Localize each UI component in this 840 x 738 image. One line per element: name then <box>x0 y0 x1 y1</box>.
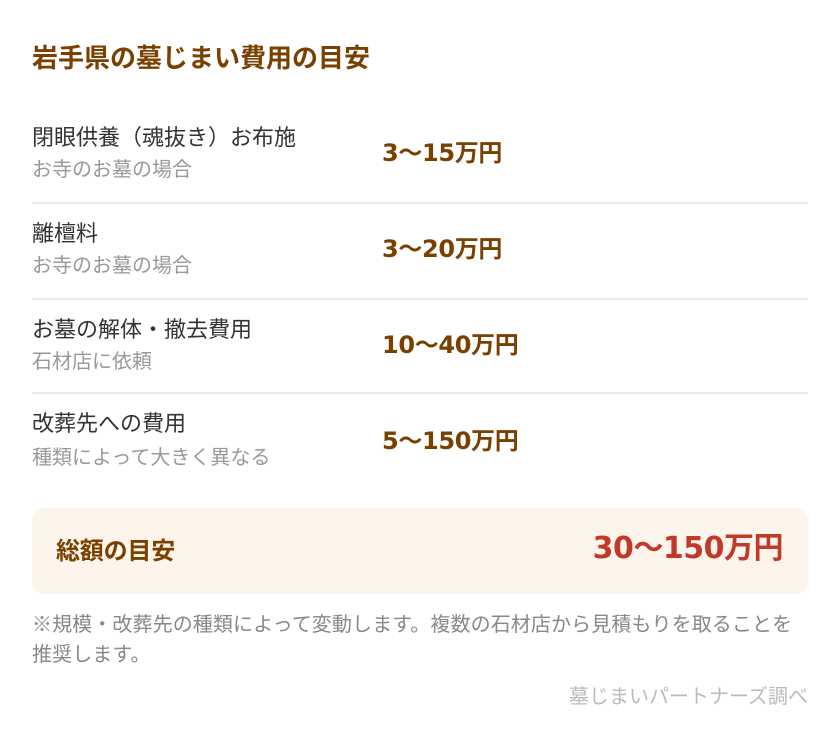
row note: 石材店に依頼 <box>32 351 152 373</box>
total panel <box>32 508 808 594</box>
row amount: 3〜15万円 <box>382 139 502 167</box>
row label: 閉眼供養（魂抜き）お布施 <box>32 125 296 150</box>
row note: お寺のお墓の場合 <box>32 255 192 277</box>
row amount: 10〜40万円 <box>382 331 518 359</box>
row note: お寺のお墓の場合 <box>32 159 192 181</box>
row label: お墓の解体・撤去費用 <box>32 317 252 342</box>
row label: 改葬先への費用 <box>32 411 186 436</box>
footnote <box>32 614 792 666</box>
total amount: 30〜150万円 <box>593 531 783 566</box>
footnote: ※規模・改葬先の種類によって変動します。複数の石材店から見積もりを取ることを <box>32 614 792 636</box>
row note: 種類によって大きく異なる <box>32 447 270 469</box>
title: 岩手県の墓じまい費用の目安 <box>32 43 370 73</box>
row amount: 5〜150万円 <box>382 427 518 455</box>
row label: 離檀料 <box>32 221 98 246</box>
total label: 総額の目安 <box>56 538 175 565</box>
row: 閉眼供養 <box>32 125 502 181</box>
source: 墓じまいパートナーズ調べ <box>569 686 808 708</box>
row amount: 3〜20万円 <box>382 235 502 263</box>
footnote: 推奨します。 <box>32 644 151 666</box>
row: 改葬先への費用 <box>32 411 518 469</box>
row: 離檀料 <box>32 221 502 277</box>
row: 解体・撤去費用 <box>32 317 518 373</box>
